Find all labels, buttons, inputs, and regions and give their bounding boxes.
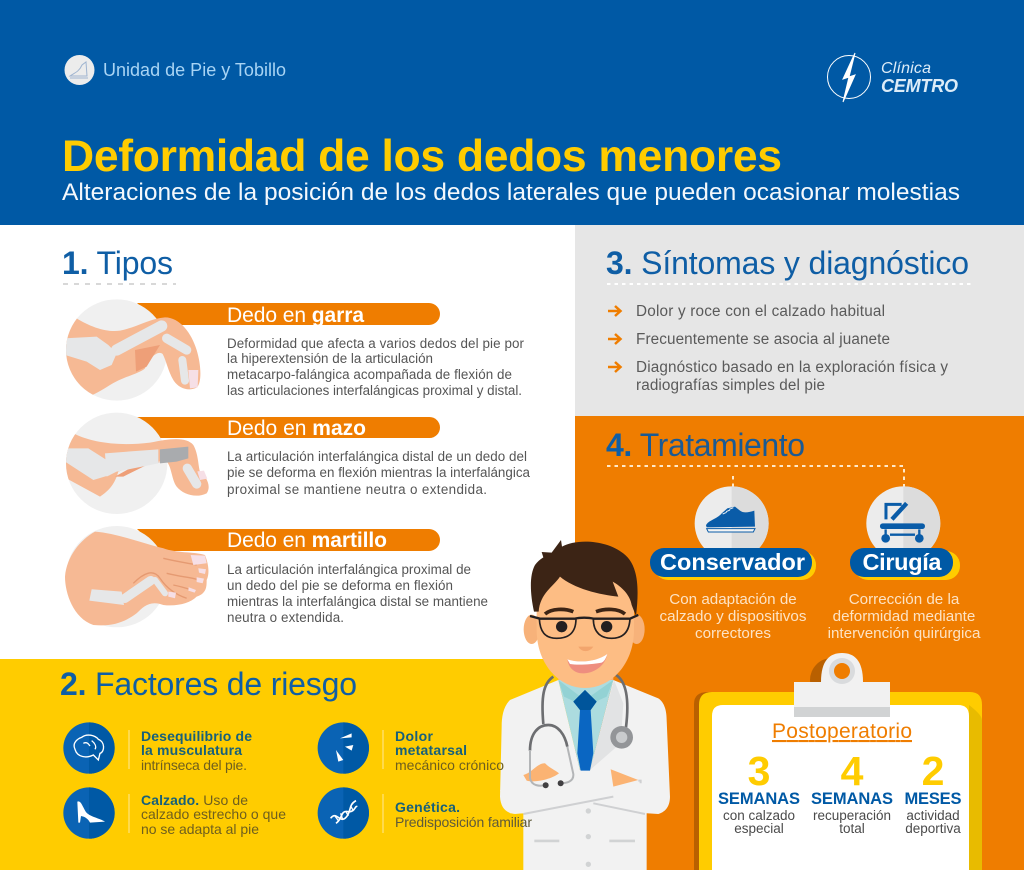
icon: surgical bed bbox=[866, 486, 940, 560]
stat: 3 semanas bbox=[718, 748, 800, 836]
icon: high heel bbox=[63, 787, 115, 839]
brows bbox=[545, 609, 625, 614]
icon: metatarsal pain bbox=[318, 722, 369, 774]
stat: 3 semanas: especial bbox=[734, 821, 784, 836]
factor: dolor metatarsal: Dolor bbox=[395, 728, 434, 744]
text: dedo en martillo: un dedo del pie se deforma en flexión bbox=[227, 578, 453, 593]
pill: cirugia bbox=[850, 548, 960, 580]
pill: conservador: Conservador bbox=[660, 549, 805, 575]
text: cirugia bbox=[828, 591, 981, 642]
text: dedo en garra: Deformidad que afecta a varios dedos del pie por bbox=[227, 336, 525, 351]
stat: 2 meses bbox=[904, 748, 962, 836]
heading: dedo en garra: Dedo en garra bbox=[227, 304, 364, 327]
illustration: doctor bbox=[500, 540, 670, 870]
shirt bbox=[558, 680, 613, 770]
title: Deformidad de los dedos menores bbox=[62, 132, 782, 181]
text: conservador bbox=[660, 591, 807, 642]
stat: 3 semanas: SEMANAS bbox=[718, 790, 800, 808]
stat: 2 meses: MESES bbox=[904, 790, 962, 808]
factor: calzado: calzado estrecho o que bbox=[141, 806, 286, 822]
stethoscope bbox=[542, 675, 627, 727]
text: dedo en garra: metacarpo-falángica acompañada de flexión de bbox=[227, 367, 512, 382]
text: dedo en mazo: proximal se mantiene neutra o extendida. bbox=[227, 482, 487, 497]
text: dedo en mazo: La articulación interfalángica distal de un dedo del bbox=[227, 449, 527, 464]
stat: 2 meses: 2 bbox=[922, 748, 944, 794]
text: dedo en garra: las articulaciones interfalángicas proximal y distal. bbox=[227, 383, 522, 398]
factor: genetica bbox=[383, 794, 532, 833]
stat: 4 semanas: total bbox=[839, 821, 865, 836]
factor: calzado: no se adapta al pie bbox=[141, 821, 259, 837]
illustration: dedo en garra bbox=[63, 299, 200, 401]
panel: factores background bbox=[0, 659, 575, 870]
unit name: Unidad de Pie y Tobillo bbox=[103, 60, 286, 80]
list: sintomas: radiografías simples del pie bbox=[636, 377, 825, 394]
factor: genetica: Predisposición familiar bbox=[395, 814, 532, 830]
logo: Clinica CEMTRO bbox=[828, 53, 958, 102]
stat: 2 meses: deportiva bbox=[905, 821, 961, 836]
tie bbox=[573, 690, 597, 771]
heading: tratamiento: 4. Tratamiento bbox=[606, 427, 805, 463]
neck bbox=[558, 670, 613, 702]
text: dedo en martillo bbox=[227, 562, 488, 625]
panel: tratamiento content bbox=[606, 427, 982, 870]
text: dedo en martillo: neutra o extendida. bbox=[227, 610, 344, 625]
panel: header bbox=[0, 0, 1024, 225]
logo: Clinica CEMTRO: Clínica bbox=[881, 60, 931, 77]
factor: musculatura: la musculatura bbox=[141, 742, 242, 758]
bar: dedo en martillo bbox=[137, 529, 440, 551]
factor: musculatura bbox=[129, 728, 252, 773]
panel: factores content bbox=[60, 666, 532, 839]
heading: tipos: 1. Tipos bbox=[62, 245, 173, 281]
list: sintomas: Diagnóstico basado en la exploración física y bbox=[636, 359, 948, 376]
text: conservador: correctores bbox=[695, 625, 771, 642]
stat: 3 semanas: con calzado bbox=[723, 808, 795, 823]
text: conservador: calzado y dispositivos bbox=[660, 608, 807, 625]
bar: dedo en mazo bbox=[137, 417, 440, 438]
panel: sintomas background bbox=[575, 225, 1024, 416]
text: cirugia: intervención quirúrgica bbox=[828, 625, 981, 642]
text: cirugia: Corrección de la bbox=[849, 591, 960, 608]
factor: musculatura: Desequilibrio de bbox=[141, 728, 252, 744]
heading: factores: 2. Factores de riesgo bbox=[60, 666, 357, 702]
icon: dna bbox=[318, 787, 369, 839]
text: dedo en garra bbox=[227, 336, 525, 398]
icon: shoe bbox=[695, 486, 769, 560]
logo: Clinica CEMTRO: CEMTRO bbox=[881, 76, 958, 96]
heading: postoperatorio: Postoperatorio bbox=[772, 720, 912, 743]
arms bbox=[500, 768, 640, 813]
heading: dedo en mazo: Dedo en mazo bbox=[227, 417, 366, 440]
glasses bbox=[530, 615, 638, 619]
icon: foot unit bbox=[64, 55, 94, 85]
list: sintomas: Dolor y roce con el calzado habitual bbox=[636, 303, 885, 320]
subtitle: Alteraciones de la posición de los dedos laterales que pueden ocasionar molestias bbox=[62, 179, 960, 206]
stat: 2 meses: actividad bbox=[906, 808, 960, 823]
text: dedo en martillo: La articulación interfalángica proximal de bbox=[227, 562, 471, 577]
panel: tipos background bbox=[0, 225, 575, 659]
stat: 4 semanas: 4 bbox=[841, 748, 864, 794]
heading: sintomas: 3. Síntomas y diagnóstico bbox=[606, 245, 969, 281]
illustration: dedo en mazo bbox=[63, 413, 209, 514]
ears bbox=[524, 615, 540, 644]
stat: 4 semanas: SEMANAS bbox=[811, 790, 893, 808]
illustration: dedo en martillo bbox=[65, 526, 208, 627]
factor: musculatura: intrínseca del pie. bbox=[141, 757, 247, 773]
list: sintomas bbox=[608, 303, 948, 394]
factor: dolor metatarsal bbox=[383, 728, 504, 773]
panel: sintomas content bbox=[606, 245, 972, 394]
stethoscope lower bbox=[530, 747, 573, 786]
factor: calzado bbox=[129, 792, 286, 837]
mouth bbox=[567, 654, 607, 673]
panel: tratamiento background bbox=[575, 416, 1024, 870]
clipboard: postoperatorio bbox=[694, 653, 982, 870]
bar: dedo en garra bbox=[137, 303, 440, 325]
stat: 4 semanas: recuperación bbox=[813, 808, 891, 823]
text: cirugia: deformidad mediante bbox=[833, 608, 975, 625]
stat: 4 semanas bbox=[811, 748, 893, 836]
list: sintomas: Frecuentemente se asocia al juanete bbox=[636, 331, 890, 348]
face bbox=[537, 570, 634, 688]
factor: calzado: Calzado. Uso de bbox=[141, 792, 248, 808]
text: dedo en martillo: mientras la interfalángica distal se mantiene bbox=[227, 594, 488, 609]
nose bbox=[578, 647, 593, 651]
factor: dolor metatarsal: mecánico crónico bbox=[395, 757, 504, 773]
factor: genetica: Genética. bbox=[395, 799, 460, 815]
coat details bbox=[586, 808, 591, 814]
text: dedo en garra: la hiperextensión de la articulación bbox=[227, 351, 433, 366]
pill: cirugia: Cirugía bbox=[862, 549, 942, 575]
hair bbox=[531, 540, 638, 616]
coat bbox=[500, 680, 670, 870]
text: dedo en mazo bbox=[227, 449, 531, 497]
factor: dolor metatarsal: metatarsal bbox=[395, 742, 467, 758]
text: dedo en mazo: pie se deforma en flexión mientras la interfalángica bbox=[227, 465, 531, 480]
text: conservador: Con adaptación de bbox=[669, 591, 797, 608]
stat: 3 semanas: 3 bbox=[748, 748, 770, 794]
heading: dedo en martillo: Dedo en martillo bbox=[227, 529, 387, 552]
icon: brain bbox=[63, 722, 115, 774]
panel: tipos content bbox=[62, 245, 531, 627]
